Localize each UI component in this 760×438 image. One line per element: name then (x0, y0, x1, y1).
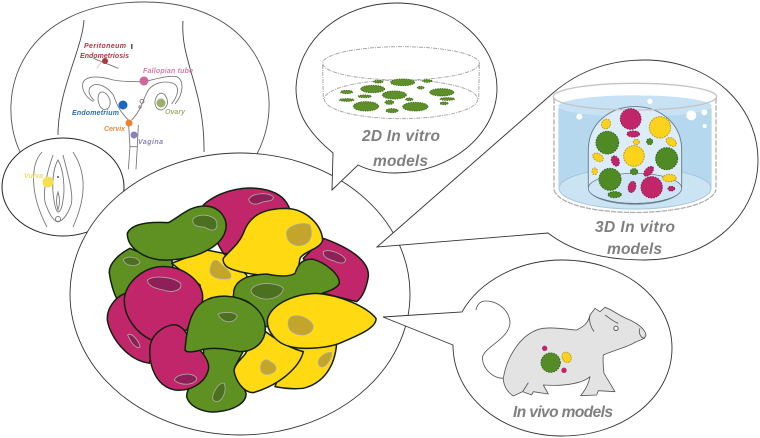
icon: culture well with dome (553, 83, 717, 212)
cell: yellow far lower right (275, 343, 337, 389)
title: 2D in vitro models (361, 128, 440, 170)
title: 2D in vitro models: 2D In vitro (361, 128, 440, 145)
label: endometrium: Endometrium (72, 110, 119, 117)
chart: tumour cell cluster (107, 188, 376, 412)
cell: yellow lower (234, 330, 303, 393)
label: vagina: Vagina (138, 139, 163, 146)
icon: mouse (476, 301, 646, 396)
title: 3D in vitro models: models (607, 241, 662, 258)
icon: cervix dot (126, 120, 132, 126)
label: vulva: Vulva (24, 173, 43, 180)
colonies: magenta (610, 109, 675, 198)
panel: vulva bubble (2, 138, 124, 236)
cell: yellow centre (172, 250, 253, 307)
cell: yellow big right (267, 293, 376, 348)
label: peritoneum: Peritoneum (84, 43, 126, 50)
cell: magenta large (124, 267, 203, 340)
mark: small dot (57, 176, 59, 178)
colonies: green (596, 131, 678, 198)
cell: magenta lower left (107, 293, 155, 363)
cell: green top-left (127, 206, 226, 260)
cell: green stem (187, 343, 247, 412)
label: cervix: Cervix (104, 126, 126, 133)
cell: yellow top (223, 208, 323, 277)
icon: vulva anatomy (34, 152, 83, 227)
cell: magenta right (303, 238, 368, 302)
colonies: yellow (591, 117, 678, 182)
title: in vivo models: In vivo models (513, 404, 613, 421)
label: endometriosis: Endometriosis (80, 53, 129, 60)
cell: green right (233, 259, 339, 327)
icon: peritoneum dot (102, 58, 108, 64)
icon: body outline (58, 20, 204, 152)
cell: green left (109, 248, 173, 298)
panel: central cell cluster bubble (70, 153, 410, 435)
label: ovary: Ovary (165, 109, 186, 116)
cell: magenta top (203, 188, 290, 257)
mark: small tick (131, 44, 132, 49)
title: 3D in vitro models (595, 219, 675, 258)
icon: endometrium dot (118, 100, 128, 110)
icon: vulva dot (42, 176, 54, 188)
mouse tail (476, 301, 510, 378)
cell nuclei (123, 194, 346, 402)
panel: female reproductive tract bubble (11, 2, 269, 169)
mouse body (503, 307, 646, 396)
icon: vagina dot (130, 132, 138, 138)
cell: green mushroom (185, 296, 265, 352)
panel: in vivo bubble (383, 260, 672, 436)
icon: ovary dot (156, 98, 166, 108)
mouse tumour colonies (541, 353, 560, 372)
icon: fallopian tube dot (140, 76, 148, 86)
panel: 2D in vitro bubble (296, 3, 497, 190)
panel: 3D in vitro bubble (377, 60, 758, 260)
title: 2D in vitro models: models (373, 153, 428, 170)
cell: magenta small (150, 325, 209, 390)
icon: petri dish with colonies (323, 47, 479, 119)
icon: uterus and tubes (83, 58, 182, 169)
title: 3D in vitro models: 3D In vitro (595, 219, 675, 236)
label: fallopian tube: Fallopian tube (143, 68, 193, 75)
